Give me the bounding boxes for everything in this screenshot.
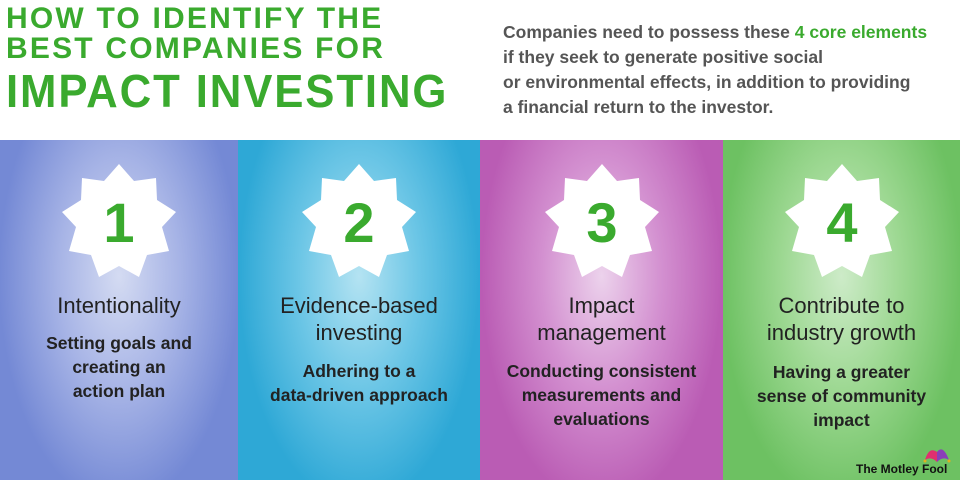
- description: Conducting consistent: [507, 361, 696, 381]
- heading: management: [537, 320, 666, 345]
- description: Adhering to a: [303, 361, 415, 381]
- panel: 1 intentionality: [0, 140, 238, 480]
- description: [270, 361, 448, 405]
- heading: Impact: [568, 293, 635, 318]
- intro text: Companies need to possess these 4 core elements: [503, 22, 927, 42]
- description: [757, 362, 926, 430]
- title: HOW TO IDENTIFY THE: [6, 2, 383, 35]
- icon: star 1: 1: [103, 191, 135, 254]
- panel: 3 impact management: [480, 140, 723, 480]
- logo: [856, 449, 950, 476]
- heading: Contribute to: [779, 293, 904, 318]
- icon: star 2: 2: [343, 191, 375, 254]
- heading: [767, 293, 916, 345]
- icon: star 4: 4: [826, 191, 857, 254]
- description: Having a greater: [773, 362, 910, 382]
- description: measurements and: [522, 385, 681, 405]
- icon: star 2: [302, 164, 416, 277]
- intro text: or environmental effects, in addition to providing: [503, 72, 910, 92]
- description: [507, 361, 696, 429]
- heading: investing: [316, 320, 402, 345]
- heading: Intentionality: [57, 293, 181, 318]
- icon: star 3: 3: [586, 191, 617, 254]
- heading: [280, 293, 438, 345]
- description: sense of community: [757, 386, 926, 406]
- panel: 4 industry growth: [723, 140, 960, 480]
- heading: Evidence-based: [280, 293, 438, 318]
- intro text: [503, 22, 927, 117]
- description: Setting goals and: [46, 333, 192, 353]
- heading: [537, 293, 666, 345]
- title: IMPACT INVESTING: [6, 65, 448, 117]
- description: [46, 333, 192, 401]
- title: BEST COMPANIES FOR: [6, 32, 385, 65]
- title: [6, 2, 448, 117]
- panel: 2 evidence-based investing: [238, 140, 480, 480]
- description: data-driven approach: [270, 385, 448, 405]
- icon: star 3: [545, 164, 659, 277]
- intro text: if they seek to generate positive social: [503, 47, 823, 67]
- intro text: a financial return to the investor.: [503, 97, 773, 117]
- icon: star 1: [62, 164, 176, 277]
- description: action plan: [73, 381, 165, 401]
- description: impact: [813, 410, 870, 430]
- description: evaluations: [553, 409, 650, 429]
- logo: The Motley Fool: [856, 462, 947, 476]
- heading: industry growth: [767, 320, 916, 345]
- icon: star 4: [785, 164, 899, 277]
- description: creating an: [72, 357, 166, 377]
